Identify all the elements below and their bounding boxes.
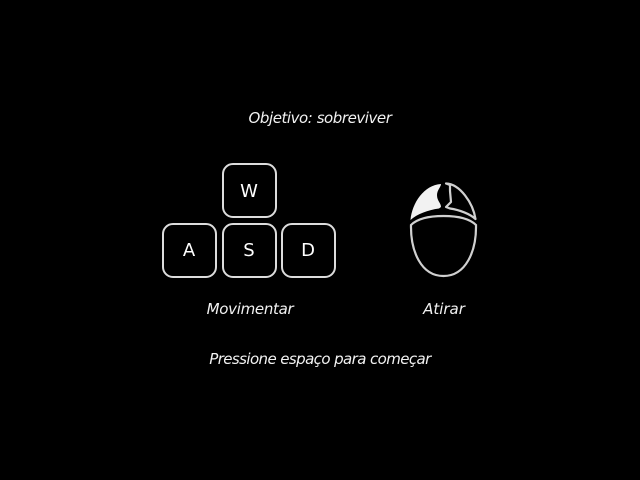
key D (281, 223, 336, 278)
key A (162, 223, 217, 278)
key D: D (301, 240, 315, 261)
heading: objective: Objetivo: sobreviver (249, 109, 391, 127)
key W: W (240, 181, 258, 202)
label: shoot: Atirar (423, 300, 465, 318)
icon: mouse with left button highlighted (410, 182, 478, 278)
key S: S (243, 240, 255, 261)
key W (222, 163, 277, 218)
mouse body (411, 216, 476, 276)
prompt: press space: Pressione espaço para começar (209, 350, 431, 368)
mouse left button (410, 184, 441, 220)
key A: A (183, 240, 195, 261)
mouse right button (446, 184, 476, 219)
label: move: Movimentar (207, 300, 293, 318)
icon: WASD keys (162, 163, 336, 278)
key S (222, 223, 277, 278)
